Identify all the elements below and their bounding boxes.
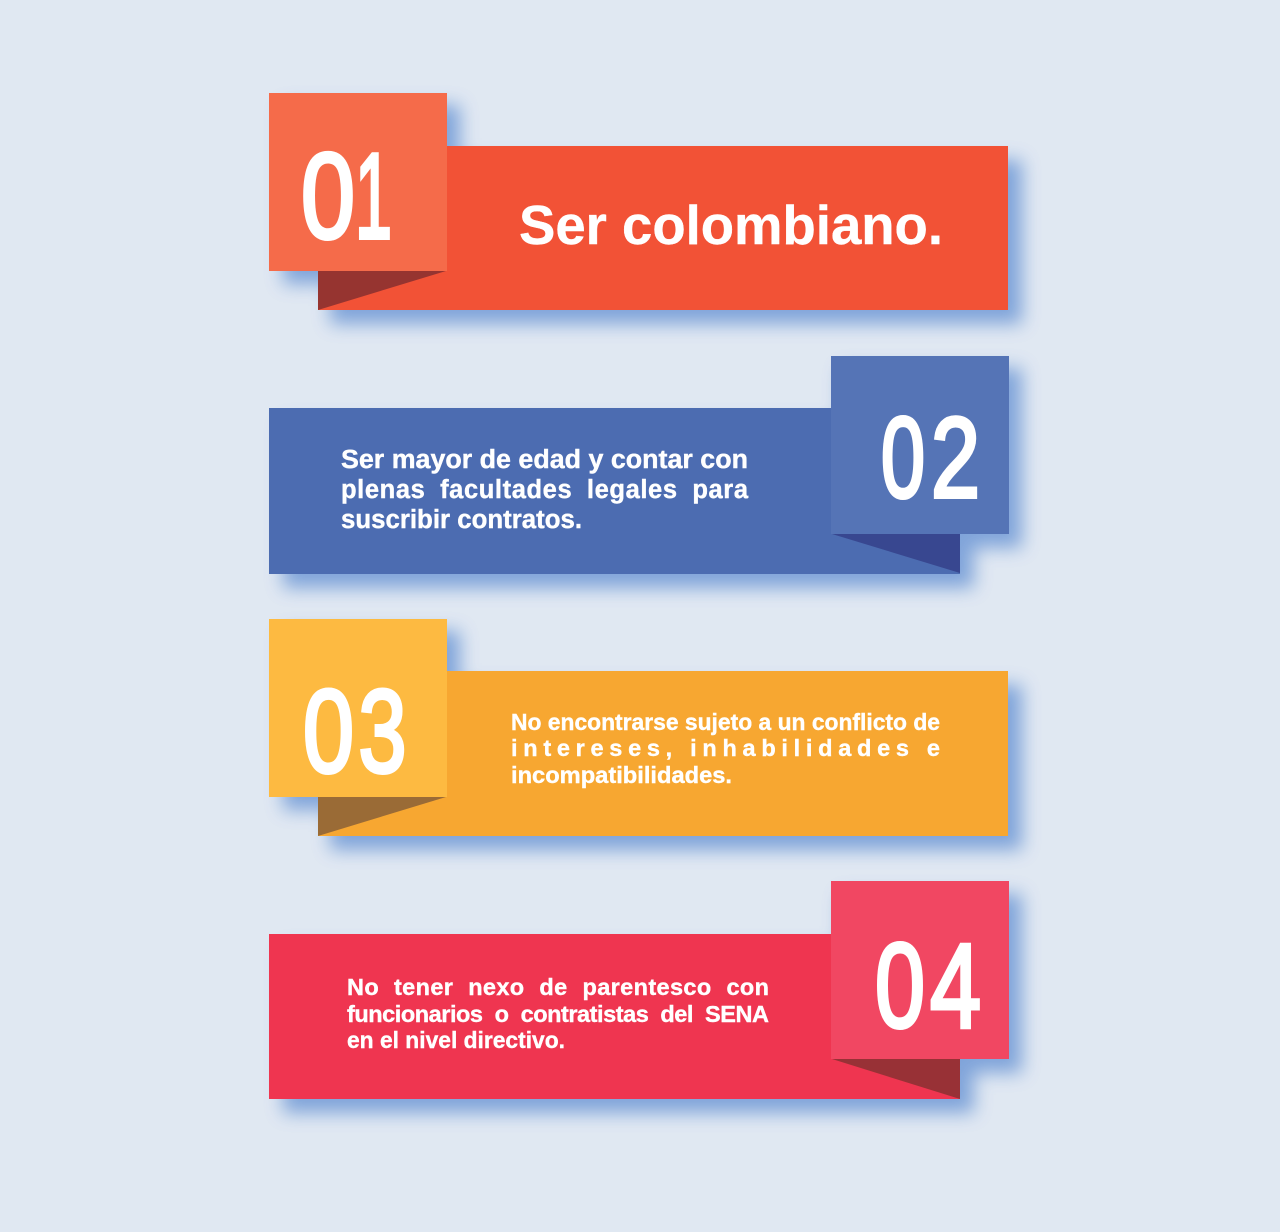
number: 02: 0 — [881, 395, 925, 522]
shadow: item 1 — [283, 105, 1022, 324]
text: item 3 — [511, 709, 940, 788]
fold: item 1 — [318, 271, 446, 310]
text: item 3: intereses, inhabilidades e — [511, 735, 940, 761]
text: item 2 — [341, 446, 749, 534]
number: 04: 4 — [930, 919, 981, 1053]
panel: item 4 — [269, 881, 1022, 1113]
ribbon: item 3 — [318, 671, 1008, 836]
fold: item 2 — [832, 534, 960, 573]
text: item 4: funcionarios o contratistas del SENA — [347, 1001, 769, 1027]
number: 01: 1 — [355, 128, 392, 264]
number: 03: 0 — [303, 666, 354, 798]
number: 04 — [875, 919, 981, 1053]
number box: item 2 — [831, 356, 1009, 534]
ribbon: item 2 — [269, 408, 960, 574]
ribbon: item 1 — [318, 146, 1008, 310]
number: 03 — [303, 666, 406, 798]
shadow: item 3 — [283, 631, 1022, 850]
number: 03: 3 — [358, 666, 406, 798]
panel: item 3 — [269, 619, 1022, 850]
text: item 2: plenas facultades legales para — [341, 476, 749, 504]
text: item 1: Ser colombiano. — [519, 194, 943, 256]
text: item 3: incompatibilidades. — [511, 762, 732, 788]
number: 04: 0 — [875, 919, 925, 1053]
number box: item 3 — [269, 619, 447, 797]
panel: item 1 — [269, 93, 1022, 324]
panel: item 2 — [269, 356, 1022, 588]
text: item 2: suscribir contratos. — [341, 506, 582, 534]
number: 02: 2 — [931, 395, 980, 522]
text: item 4: en el nivel directivo. — [347, 1027, 565, 1053]
number: 02 — [881, 395, 980, 522]
number box: item 1 — [269, 93, 447, 271]
number: 01: 0 — [301, 128, 355, 264]
ribbon: item 4 — [269, 934, 960, 1099]
text: item 4 — [347, 974, 769, 1053]
fold: item 3 — [318, 797, 446, 836]
number box: item 4 — [831, 881, 1009, 1059]
text: item 3: No encontrarse sujeto a un conflicto de — [511, 709, 940, 735]
text: item 4: No tener nexo de parentesco con — [347, 974, 769, 1000]
text: item 2: Ser mayor de edad y contar con — [341, 446, 748, 474]
shadow: item 2 — [283, 368, 1022, 588]
shadow: item 4 — [283, 894, 1022, 1113]
fold: item 4 — [832, 1059, 960, 1099]
